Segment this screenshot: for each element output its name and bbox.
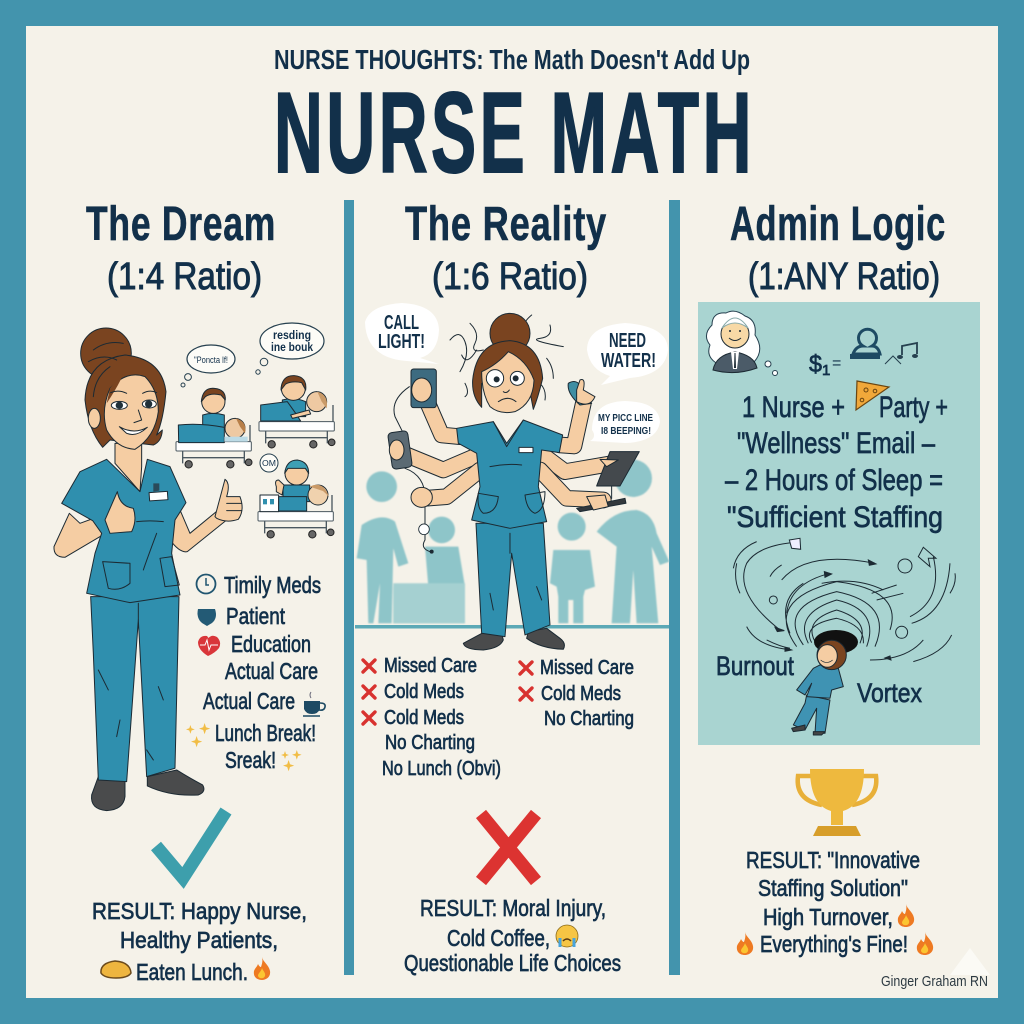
panel: admin logic xyxy=(698,198,980,957)
icon: chat heart xyxy=(198,609,216,626)
list: missed care right column: No Charting xyxy=(544,708,634,730)
icon: large check xyxy=(156,811,226,878)
speech bubble: call light xyxy=(365,303,439,364)
checklist: dream outcomes xyxy=(186,572,325,773)
speech bubble: picc line: I8 BEEPING! xyxy=(601,425,651,437)
text: sreak: Sreak! xyxy=(225,747,276,773)
speech bubble: need water xyxy=(587,323,668,385)
result: reality: RESULT: Moral Injury, xyxy=(420,895,606,921)
text: patient: Patient xyxy=(226,603,285,629)
heading: admin logic: Admin Logic xyxy=(730,198,946,251)
illustration: nurse falling into vortex xyxy=(792,640,846,735)
heading: admin logic xyxy=(730,198,946,298)
equation text: – 2 Hours of Sleep = xyxy=(725,464,943,497)
thought bubble: patient one: "Poncta lf! xyxy=(194,355,228,365)
result: admin: High Turnover, xyxy=(763,904,893,930)
icon: pizza slice xyxy=(856,381,889,410)
speech bubble: call light: CALL xyxy=(384,312,419,334)
list: missed care left column: No Charting xyxy=(385,732,475,754)
speech bubble: need water: NEED xyxy=(609,330,646,352)
heading: admin logic: (1:ANY Ratio) xyxy=(748,256,940,298)
list: missed care left column xyxy=(363,655,501,780)
list: missed care left column: No Lunch (Obvi) xyxy=(382,758,501,780)
list: missed care right column xyxy=(520,657,634,730)
list: missed care left column: Cold Meds xyxy=(384,707,464,729)
teal equation panel xyxy=(698,302,980,745)
vortex hole xyxy=(814,630,858,654)
icon: bread xyxy=(101,961,131,978)
list: missed care left column: Missed Care xyxy=(384,655,477,677)
speech bubble: call light: LIGHT! xyxy=(378,331,425,353)
result: reality: Cold Coffee, xyxy=(447,925,550,951)
equation symbols: 1 xyxy=(822,362,830,379)
column divider right xyxy=(669,200,680,975)
heading: the dream xyxy=(86,198,276,298)
text: education: Education xyxy=(231,631,311,657)
equation text: 1 Nurse + xyxy=(742,391,845,424)
thought bubble: reading the book xyxy=(256,323,324,374)
speech bubble: picc line: MY PICC LINE xyxy=(598,412,653,424)
list: missed care left column: Cold Meds xyxy=(384,681,464,703)
thought bubble: patient one xyxy=(181,345,235,387)
text: actual care: Actual Care xyxy=(225,658,318,684)
result: dream: Eaten Lunch. xyxy=(136,959,248,985)
illustration: frazzled nurse with six arms xyxy=(388,313,639,650)
heading: the reality: The Reality xyxy=(405,198,607,251)
icon: fire xyxy=(898,904,914,927)
result: admin: Everything's Fine! xyxy=(760,931,908,957)
result: reality xyxy=(404,895,621,976)
floor line xyxy=(355,625,669,628)
speech bubble: small: OM xyxy=(262,459,276,468)
speech bubble: small xyxy=(260,454,278,472)
text: actual care repeated: Actual Care xyxy=(203,688,295,714)
thought bubble: reading the book: resding xyxy=(273,328,311,342)
icon: sparkles left xyxy=(186,723,210,747)
equation symbols: $ xyxy=(809,351,822,378)
icon: trophy xyxy=(798,769,876,836)
result: admin xyxy=(737,847,933,957)
icon: fire xyxy=(917,932,933,955)
text: burnout: Burnout xyxy=(716,651,794,681)
equation text: "Wellness" Email – xyxy=(737,427,935,460)
result: dream: RESULT: Happy Nurse, xyxy=(92,898,307,924)
result: admin: RESULT: "Innovative xyxy=(746,847,920,873)
icon: fire xyxy=(737,932,753,955)
subtitle: NURSE THOUGHTS: The Math Doesn't Add Up xyxy=(274,44,750,75)
list: missed care right column: Missed Care xyxy=(540,657,634,679)
heading: the reality: (1:6 Ratio) xyxy=(432,256,588,298)
result: dream: Healthy Patients, xyxy=(120,927,278,953)
illustration: happy nurse thumbs up xyxy=(54,328,242,811)
panel: the dream xyxy=(54,198,335,985)
illustration: shadow patients xyxy=(357,460,669,623)
icon: crying face xyxy=(556,925,578,947)
text: timely meds: Timily Meds xyxy=(224,572,321,598)
speech bubble: picc line xyxy=(590,401,660,443)
heading: the dream: (1:4 Ratio) xyxy=(107,256,262,298)
illustration: bed scene one xyxy=(176,388,252,468)
equation text xyxy=(725,381,948,534)
icon: sparkles right xyxy=(281,750,302,771)
equation text: Party + xyxy=(879,391,948,424)
speech bubble: need water: WATER! xyxy=(601,350,656,372)
heading: the dream: The Dream xyxy=(86,198,276,251)
illustration: burnout vortex xyxy=(733,538,955,662)
panel: the reality xyxy=(355,198,669,976)
illustration: bed scene two xyxy=(259,376,335,448)
icon: administrator thought bubble xyxy=(706,311,778,376)
result: dream xyxy=(92,898,307,985)
heading: the reality xyxy=(405,198,607,298)
thought bubble: reading the book: ine bouk xyxy=(271,340,313,354)
signature: Ginger Graham RN xyxy=(881,973,988,990)
illustration: bed scene three xyxy=(258,460,334,538)
text: lunch break: Lunch Break! xyxy=(215,720,316,746)
equation symbols: = xyxy=(832,355,841,372)
text: vortex: Vortex xyxy=(857,678,922,708)
signature xyxy=(881,948,990,990)
icon: large red x xyxy=(481,814,536,881)
result: admin: Staffing Solution" xyxy=(758,875,908,901)
column divider left xyxy=(344,200,354,975)
equation symbols xyxy=(809,329,918,379)
result: reality: Questionable Life Choices xyxy=(404,950,621,976)
icon: fire xyxy=(254,957,270,980)
equation text: "Sufficient Staffing xyxy=(727,501,943,534)
icon: red heart xyxy=(198,636,220,656)
list: missed care right column: Cold Meds xyxy=(541,683,621,705)
icon: clock xyxy=(196,574,216,594)
icon: coffee cup xyxy=(303,692,325,716)
